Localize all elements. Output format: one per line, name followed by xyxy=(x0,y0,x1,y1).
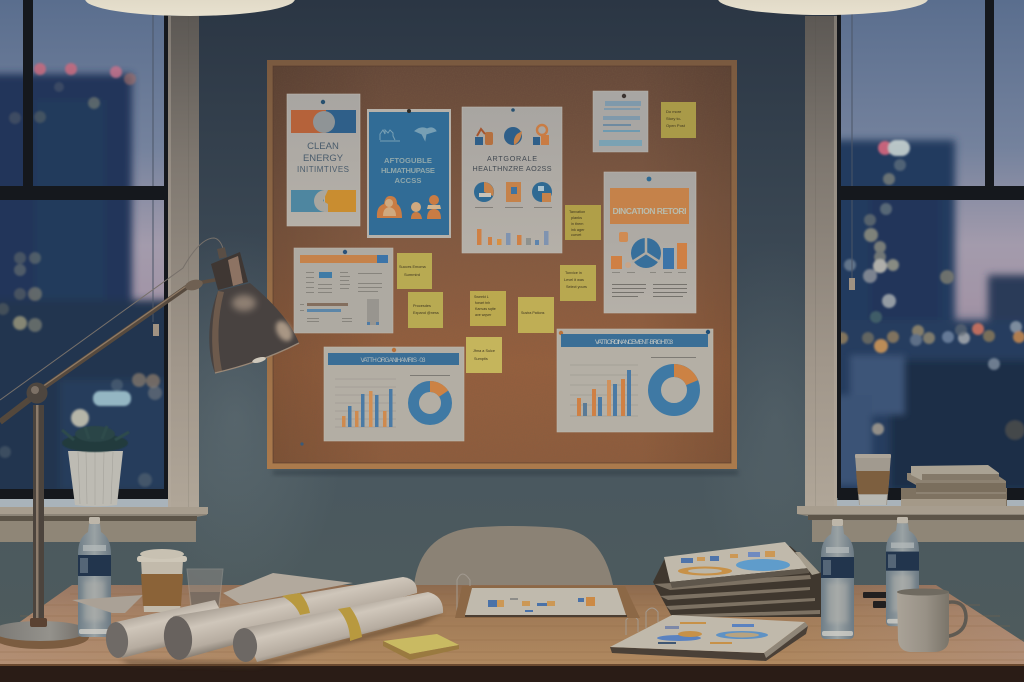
booklet on desk xyxy=(610,615,808,661)
report cover graphics xyxy=(678,551,790,576)
sticky note: processes xyxy=(408,292,443,328)
sticky note: summary xyxy=(397,253,432,289)
poster: healthcare access with charts: HEALTHNZRE AO2SS xyxy=(472,164,552,173)
poster: clean energy initiatives: INITIMTIVES xyxy=(297,165,349,174)
paper sheets behind left items xyxy=(72,573,353,613)
paper coffee cup xyxy=(137,549,187,612)
poster: clean energy initiatives xyxy=(287,94,360,226)
sticky note beside education poster xyxy=(560,265,596,301)
sticky note right of healthcare poster: Tanvation xyxy=(569,210,585,214)
sticky note beside education poster: Level it was xyxy=(564,278,584,282)
sticky note: processes: Expand @ness xyxy=(413,311,439,315)
sticky note right of healthcare poster: planks xyxy=(571,216,582,220)
sticky note top right: Open Post xyxy=(666,123,686,128)
bar chart xyxy=(342,389,392,427)
water bottle right xyxy=(886,517,919,626)
poster title: CLEAN xyxy=(307,141,339,152)
sheet title: VATTH ORGANIHAMRIS · 03 xyxy=(360,357,426,364)
donut chart xyxy=(654,370,694,410)
right window with blurred city view xyxy=(830,0,1024,500)
desk xyxy=(0,585,1024,682)
sticky note beside education poster: Tonvice in xyxy=(565,271,582,275)
sticky note right of healthcare poster xyxy=(565,205,601,240)
donut chart xyxy=(414,386,446,420)
water bottle center right xyxy=(821,519,854,639)
clipboard and document on desk xyxy=(455,586,640,618)
coffee cup on right sill xyxy=(855,454,891,505)
sticky note: list xyxy=(470,291,506,326)
poster: healthcare access with charts xyxy=(462,107,562,253)
drinking glass xyxy=(187,569,223,608)
small note sheet xyxy=(593,91,648,152)
sticky note right of healthcare poster: in them xyxy=(571,222,583,226)
sticky note: lower xyxy=(466,337,502,373)
poster title: ARTGORALE xyxy=(487,154,537,163)
sticky note right of healthcare poster: ink ager xyxy=(571,228,585,232)
sticky note top right: Do more xyxy=(666,109,682,114)
poster title: DINCATION RETORI xyxy=(612,206,686,216)
sticky note: lower: Sumptis xyxy=(474,357,488,361)
icons row xyxy=(475,125,549,145)
sticky note: list: Kanvas sqtte xyxy=(475,307,496,311)
bar chart xyxy=(477,229,548,245)
left window frame xyxy=(0,0,168,499)
pull cord xyxy=(849,14,855,290)
stack of books on right sill xyxy=(901,465,1007,506)
pens on desk xyxy=(863,592,887,608)
roll front xyxy=(231,592,443,663)
left window with blurred city view xyxy=(0,0,164,489)
sticky note: center xyxy=(518,297,554,333)
yellow sticky pad on desk xyxy=(383,634,459,660)
sticky note: lower: Jfma a Sulce xyxy=(473,349,495,353)
lamp arm, cable and shade xyxy=(0,238,299,422)
pendant lamps xyxy=(85,0,928,16)
sticky note: list: Sweekt L xyxy=(474,295,489,299)
water bottle left xyxy=(78,517,111,637)
sticky note: center: Sustra Pations xyxy=(521,311,545,315)
poster: affordable healthcare access: HLMATHUPASE xyxy=(381,166,435,175)
roll middle xyxy=(162,577,417,661)
sticky note right of healthcare poster: curvet xyxy=(571,233,582,237)
right window trim and sill xyxy=(797,16,1024,542)
poster title: AFTOGUBLE xyxy=(384,156,432,165)
sheet title: VATTI ORDINANCEMENT · BRIGHT: 03 xyxy=(595,339,673,346)
icon: people xyxy=(377,195,441,219)
poster: affordable healthcare access xyxy=(367,109,451,238)
poster: clean energy initiatives: ENERGY xyxy=(303,153,344,164)
pie chart xyxy=(631,236,661,268)
small charts row xyxy=(474,182,552,208)
coffee mug xyxy=(897,588,966,652)
bar chart xyxy=(577,370,631,416)
chair back xyxy=(414,526,613,585)
sticky note beside education poster: Select yours xyxy=(566,285,587,289)
sticky note: summary: Summird xyxy=(404,272,420,277)
rolled posters xyxy=(104,577,445,668)
sticky note: list: ave wqver xyxy=(475,313,492,317)
sticky note: list: foeart tnh xyxy=(475,301,490,305)
roll back left xyxy=(104,600,230,659)
bars xyxy=(611,243,687,269)
sticky note top right: Story to- xyxy=(666,116,682,121)
chart sheet left xyxy=(324,347,464,441)
stack of printed reports xyxy=(653,542,822,618)
left window trim and sill xyxy=(0,16,208,542)
cork board xyxy=(267,60,738,475)
report sheet with bars xyxy=(294,248,393,333)
poster: affordable healthcare access: ACCSS xyxy=(394,176,422,185)
binder clips xyxy=(457,574,658,635)
sticky note top right xyxy=(661,102,696,138)
right window frame xyxy=(837,0,1024,500)
plant on left sill xyxy=(62,426,129,506)
pull cord xyxy=(153,14,159,336)
poster: education reform xyxy=(604,172,696,313)
lamp pole and base xyxy=(0,382,89,649)
sticky note: processes: Procesdes xyxy=(413,304,431,308)
sticky note: summary: Succes Emoma xyxy=(399,265,426,269)
chart sheet right xyxy=(557,329,713,432)
